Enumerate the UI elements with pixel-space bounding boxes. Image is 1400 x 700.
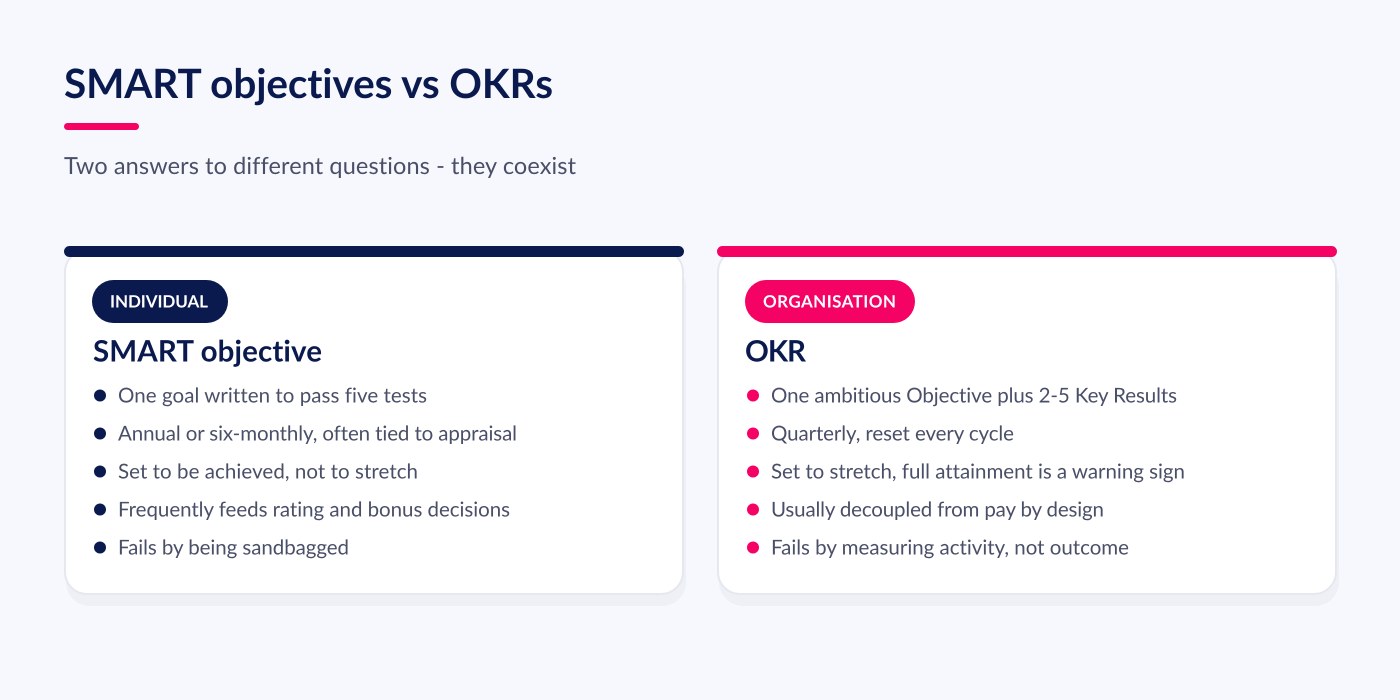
heading: SMART objective: SMART objective [93, 334, 322, 368]
list: OKR points: Fails by measuring activity, not outcome [771, 536, 1129, 560]
list: SMART points: Annual or six-monthly, often tied to appraisal [118, 422, 517, 446]
list: SMART points: Fails by being sandbagged [118, 536, 349, 560]
list: OKR points [747, 384, 1185, 560]
title: SMART objectives vs OKRs [64, 58, 553, 107]
list: OKR points: One ambitious Objective plus 2-5 Key Results [771, 384, 1177, 408]
title accent underline [64, 123, 139, 130]
list: SMART points: Frequently feeds rating and bonus decisions [118, 498, 510, 522]
list: OKR points: Usually decoupled from pay by design [771, 498, 1104, 522]
list: SMART points: Set to be achieved, not to stretch [118, 460, 418, 484]
list: OKR points: Set to stretch, full attainment is a warning sign [771, 460, 1185, 484]
badge: organisation: ORGANISATION [763, 290, 896, 312]
list: SMART points [94, 384, 517, 560]
badge: organisation [745, 280, 915, 323]
panel: OKR [717, 246, 1339, 606]
subtitle: Two answers to different questions - they coexist [64, 152, 577, 180]
panel: SMART objective [64, 246, 686, 606]
badge: individual: INDIVIDUAL [110, 290, 208, 312]
heading: OKR: OKR [745, 334, 807, 368]
list: SMART points: One goal written to pass five tests [118, 384, 427, 408]
badge: individual [92, 280, 228, 323]
list: OKR points: Quarterly, reset every cycle [771, 422, 1014, 446]
